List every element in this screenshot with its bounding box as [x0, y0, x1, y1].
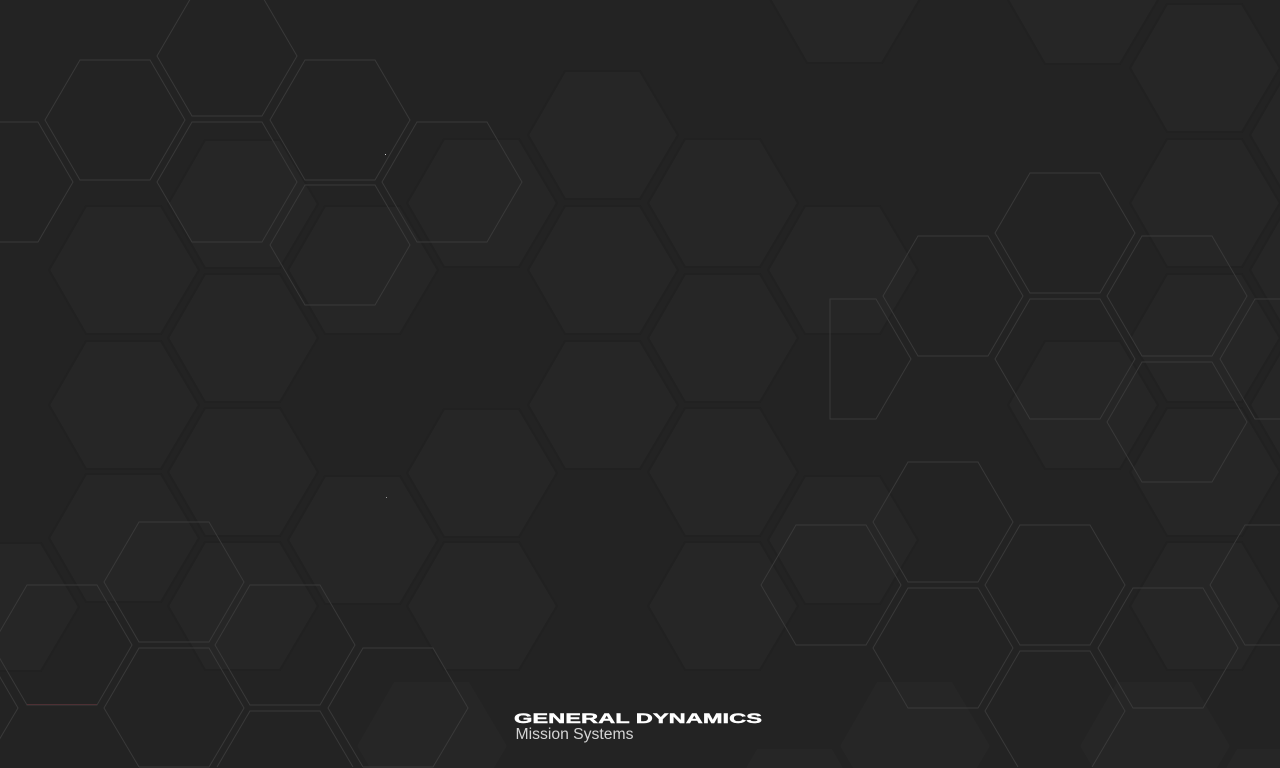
logo: General Dynamics Mission Systems: [514, 710, 762, 743]
accent marks: [27, 154, 387, 704]
outlined hexagons: right middle cluster: [830, 173, 1280, 482]
outlined hexagons: bottom right cluster: [761, 462, 1280, 767]
logo: General Dynamics Mission Systems: GENERAL DYNAMICS: [514, 710, 762, 726]
outlined hexagons: top left cluster: [0, 0, 522, 305]
logo: General Dynamics Mission Systems: Mission Systems: [516, 726, 634, 743]
outlined hexagons: bottom left cluster: [0, 522, 468, 767]
